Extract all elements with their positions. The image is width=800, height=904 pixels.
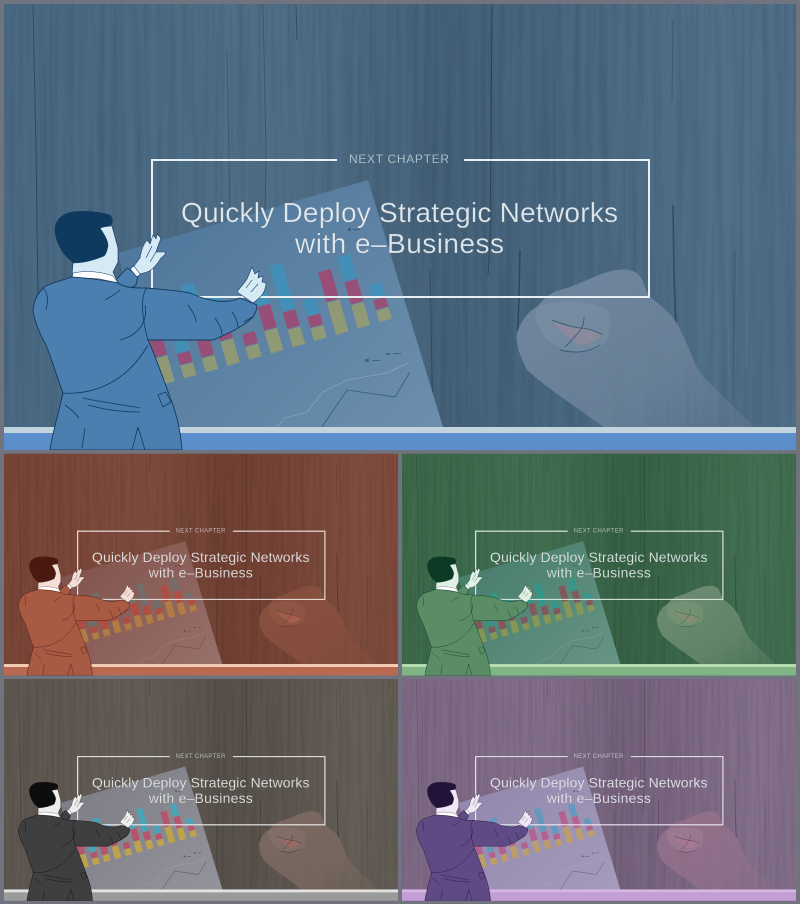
wood wall with chart paper and fist photo xyxy=(402,679,796,901)
title: with e–Business xyxy=(148,564,253,580)
title: with e–Business xyxy=(546,564,651,580)
title frame xyxy=(152,160,649,297)
label: next chapter: NEXT CHAPTER xyxy=(176,529,226,535)
label: next chapter: NEXT CHAPTER xyxy=(349,152,449,166)
illustration: businessman xyxy=(18,782,134,901)
title xyxy=(182,202,617,254)
panel: green slide xyxy=(402,454,796,675)
illustration: businessman xyxy=(33,211,266,450)
panel: grey slide xyxy=(4,679,398,901)
label: next chapter: NEXT CHAPTER xyxy=(574,754,624,760)
title: Quickly Deploy Strategic Networks xyxy=(490,774,707,790)
wood wall with chart paper and fist photo xyxy=(402,454,796,675)
panel: red slide xyxy=(4,454,398,675)
title: with e–Business xyxy=(294,228,504,259)
title xyxy=(92,777,309,804)
title frame xyxy=(476,531,723,599)
bottom stripe xyxy=(402,889,796,901)
bottom stripe xyxy=(402,664,796,675)
title: Quickly Deploy Strategic Networks xyxy=(92,549,309,565)
title: Quickly Deploy Strategic Networks xyxy=(490,549,707,565)
bottom stripe xyxy=(4,427,796,450)
bottom stripe xyxy=(4,664,398,675)
title: with e–Business xyxy=(546,790,651,806)
panel: blue main slide xyxy=(4,4,796,450)
title: Quickly Deploy Strategic Networks xyxy=(92,774,309,790)
title: Quickly Deploy Strategic Networks xyxy=(181,197,618,228)
illustration: businessman xyxy=(18,557,134,675)
title frame xyxy=(78,757,325,825)
title xyxy=(490,552,707,578)
label: next chapter: NEXT CHAPTER xyxy=(574,529,624,535)
title: with e–Business xyxy=(148,790,253,806)
bottom stripe xyxy=(4,889,398,901)
illustration: businessman xyxy=(416,557,532,675)
label: next chapter: NEXT CHAPTER xyxy=(176,754,226,760)
illustration: businessman xyxy=(416,782,532,901)
title xyxy=(92,552,309,578)
title frame xyxy=(476,757,723,825)
wood wall with chart paper and fist photo xyxy=(4,4,796,450)
title frame xyxy=(78,531,325,599)
panel: purple slide xyxy=(402,679,796,901)
wood wall with chart paper and fist photo xyxy=(4,454,398,675)
title xyxy=(490,778,707,803)
wood wall with chart paper and fist photo xyxy=(4,679,398,901)
